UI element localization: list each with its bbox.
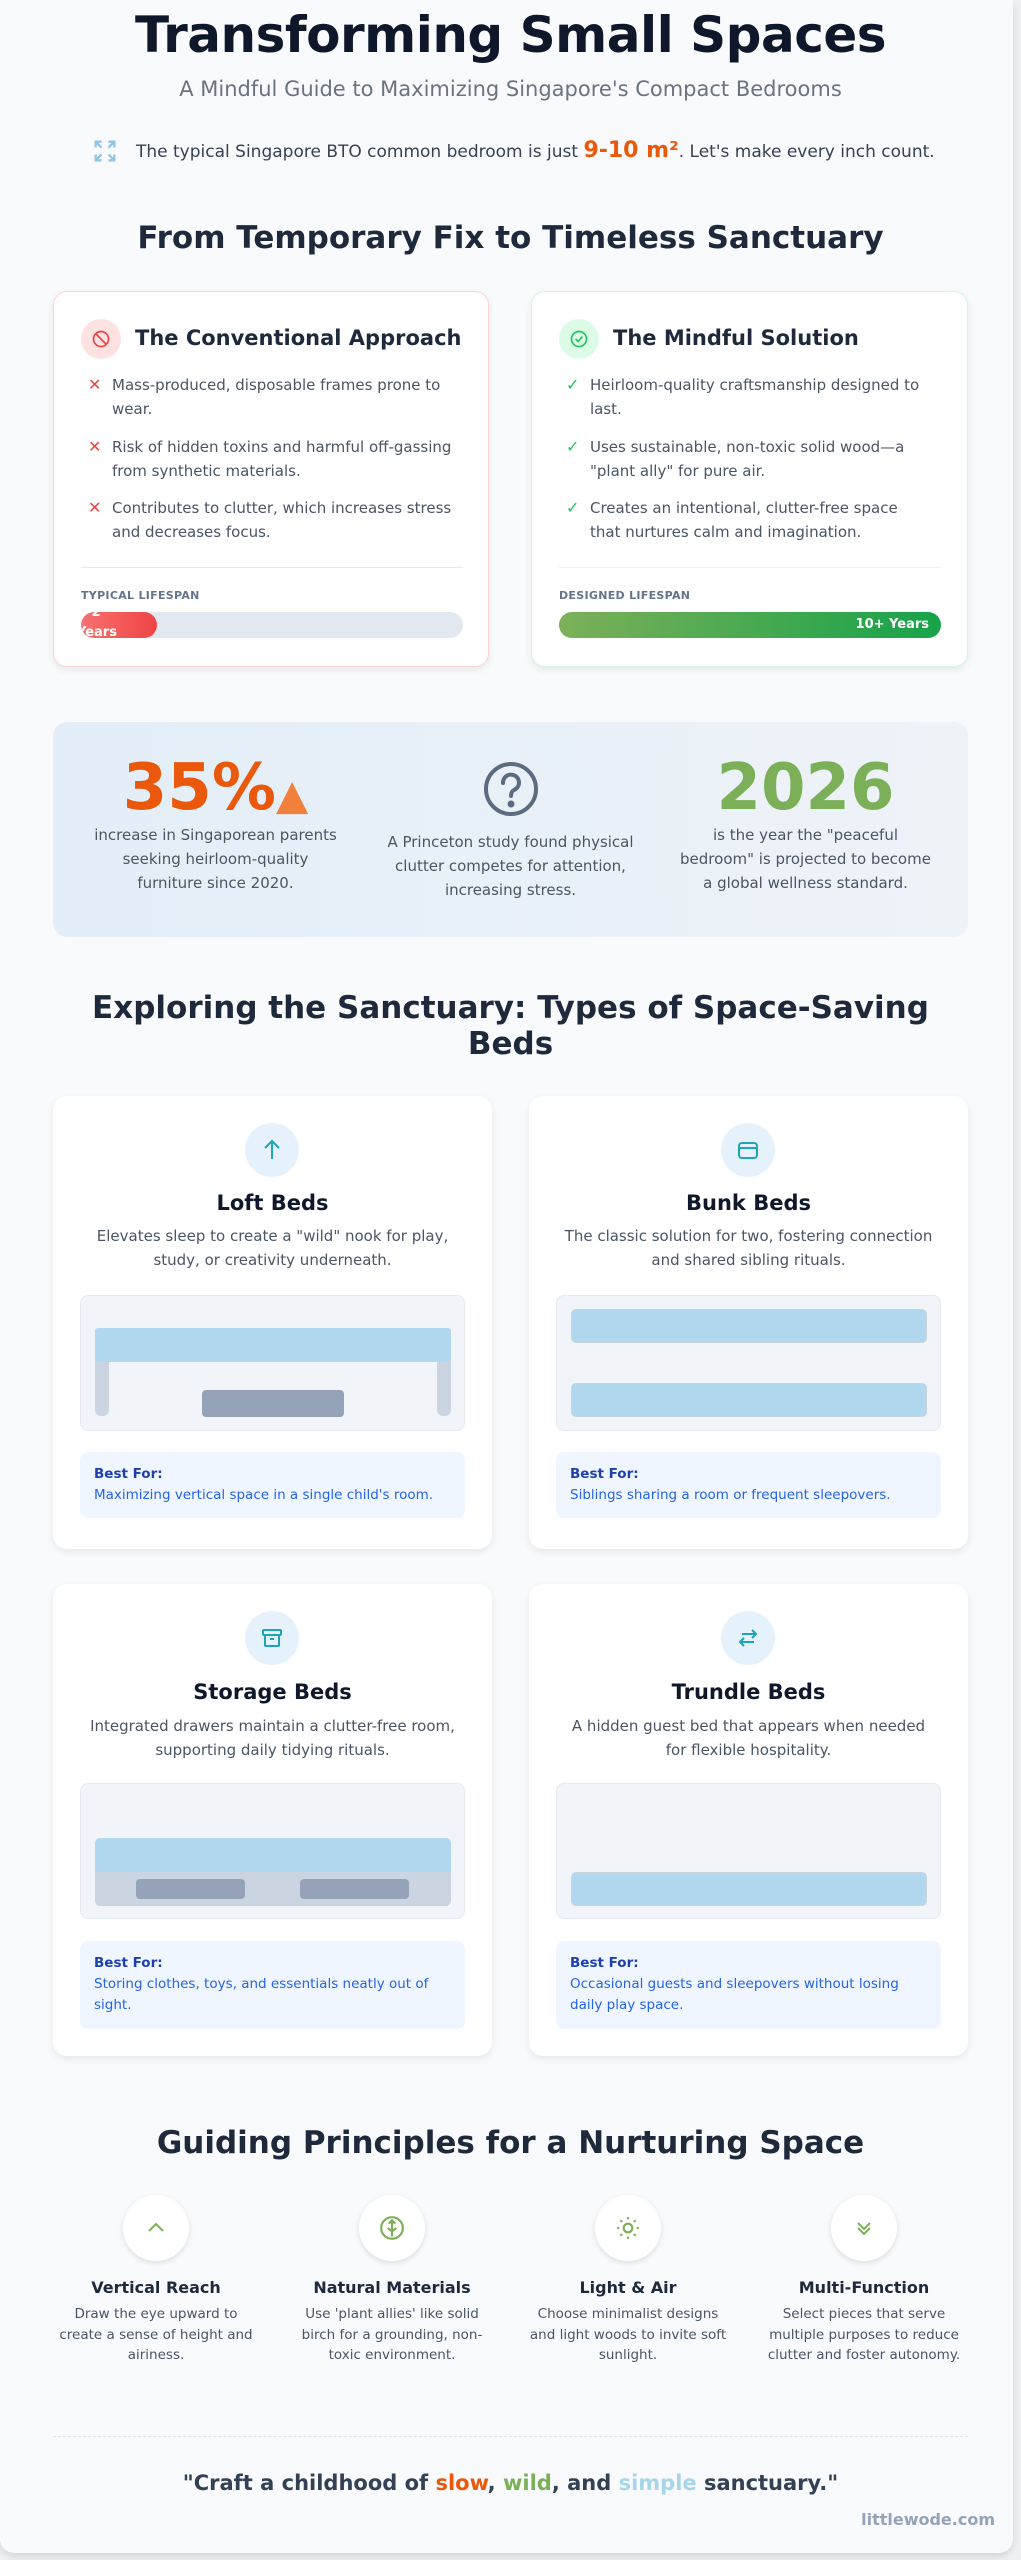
panel: conventional approach: ✕: [88, 375, 101, 394]
heading: guiding principles: Guiding Principles for a Nurturing Space: [157, 2125, 864, 2161]
best for: Occasional guests and sleepovers without losing daily play space.: [570, 1976, 899, 2013]
card: trundle beds: A hidden guest bed that appears when needed for flexible hospitality.: [572, 1717, 925, 1759]
text: Light & Air: [579, 2278, 677, 2297]
text: Multi-Function: [799, 2278, 929, 2297]
panel: mindful solution: Creates an intentional, clutter-free space that nurtures calm and imagination.: [590, 499, 898, 541]
card: bunk beds: The classic solution for two, fostering connection and shared sibling rituals.: [565, 1227, 932, 1269]
bar: 10+ years: [559, 612, 941, 638]
best for: Storing clothes, toys, and essentials neatly out of sight.: [94, 1976, 428, 2013]
icon: archive: [245, 1611, 299, 1665]
best for: [556, 1452, 941, 1518]
icon: question: [484, 762, 538, 816]
best for: [80, 1452, 465, 1518]
text: Natural Materials: [313, 2278, 471, 2297]
card: bunk beds: Bunk Beds: [686, 1191, 811, 1215]
icon: check circle: [559, 319, 599, 359]
panel: mindful solution: Uses sustainable, non-toxic solid wood—a "plant ally" for pure air.: [590, 438, 904, 480]
info line: [94, 138, 935, 163]
icon: bunk: [721, 1123, 775, 1177]
title: Transforming Small Spaces: [135, 6, 886, 64]
heading: from temporary fix: From Temporary Fix to Timeless Sanctuary: [137, 220, 884, 256]
bar: 10+ years: 10+ Years: [856, 617, 929, 632]
illustration: trundle bed: [556, 1783, 941, 1919]
panel: conventional approach: Contributes to clutter, which increases stress and decreases focus.: [112, 499, 451, 541]
stat: 35%: increase in Singaporean parents seeking heirloom-quality furniture since 2020.: [94, 826, 337, 892]
panel: conventional approach: ✕: [88, 437, 101, 456]
principle: light & air: [594, 2211, 662, 2264]
stat: 35%: [94, 751, 337, 892]
text: Select pieces that serve multiple purposes to reduce clutter and foster autonomy.: [768, 2306, 960, 2363]
text: Vertical Reach: [91, 2278, 221, 2297]
best for: Best For:: [94, 1955, 163, 1971]
panel: mindful solution: ✓: [566, 498, 579, 517]
icon: double chevron: [831, 2195, 897, 2261]
bar: 1-2 years: [81, 612, 463, 638]
principle: natural materials: [358, 2211, 426, 2264]
icon: expand arrows: [94, 140, 116, 162]
stat: 2026: is the year the "peaceful bedroom" is projected to become a global wellness standard.: [680, 826, 931, 892]
label: designed lifespan: DESIGNED LIFESPAN: [559, 589, 690, 602]
text: Choose minimalist designs and light woods to invite soft sunlight.: [530, 2306, 726, 2363]
panel: mindful solution: ✓: [566, 437, 579, 456]
illustration: storage bed: [80, 1783, 465, 1919]
card: storage beds: Storage Beds: [193, 1680, 352, 1704]
best for: [80, 1941, 465, 2029]
card: trundle beds: Trundle Beds: [672, 1680, 825, 1704]
best for: [556, 1941, 941, 2029]
icon: tree: [359, 2195, 425, 2261]
subtitle: A Mindful Guide to Maximizing Singapore's Compact Bedrooms: [179, 77, 842, 101]
icon: sun: [595, 2195, 661, 2261]
card: storage beds: Integrated drawers maintain a clutter-free room, supporting daily tidying rituals.: [90, 1717, 455, 1759]
illustration: bunk bed: [556, 1295, 941, 1431]
panel: conventional approach: [53, 291, 489, 667]
label: typical lifespan: TYPICAL LIFESPAN: [81, 589, 200, 602]
card: bunk beds: [529, 1096, 968, 1549]
best for: Best For:: [570, 1955, 639, 1971]
card: loft beds: Elevates sleep to create a "wild" nook for play, study, or creativity underneath.: [97, 1227, 448, 1269]
panel: stats: [53, 722, 968, 937]
icon: swap arrows: [721, 1611, 775, 1665]
heading: exploring the sanctuary: Exploring the Sanctuary: Types of Space-Saving Beds: [92, 990, 929, 1062]
card: loft beds: [53, 1096, 492, 1549]
stat: 2026: 2026: [716, 751, 895, 825]
heading: The Mindful Solution: [613, 326, 859, 350]
icon: prohibited: [81, 319, 121, 359]
stat: 2026: [680, 751, 931, 892]
illustration: loft bed: [80, 1295, 465, 1431]
panel: mindful solution: [531, 291, 968, 667]
best for: Siblings sharing a room or frequent sleepovers.: [570, 1487, 891, 1503]
card: storage beds: [53, 1584, 492, 2056]
panel: mindful solution: ✓: [566, 375, 579, 394]
stat: 35%: 35%▲: [123, 751, 308, 825]
footer: brand: littlewode.com: [861, 2510, 995, 2529]
best for: Best For:: [570, 1466, 639, 1482]
principle: multi-function: [830, 2211, 898, 2264]
heading: The Conventional Approach: [135, 326, 461, 350]
stat: princeton: A Princeton study found physical clutter competes for attention, increasing stress.: [387, 833, 634, 899]
text: Draw the eye upward to create a sense of height and airiness.: [59, 2306, 253, 2363]
bullets: Heirloom-quality craftsmanship designed to last.: [590, 376, 919, 418]
panel: conventional approach: ✕: [88, 498, 101, 517]
info text: The typical Singapore BTO common bedroom is just 9-10 m². Let's make every inch count.: [136, 138, 935, 163]
principle: vertical reach: [122, 2211, 190, 2264]
best for: Maximizing vertical space in a single child's room.: [94, 1487, 433, 1503]
icon: chevron up: [123, 2195, 189, 2261]
quote: "Craft a childhood of slow, wild, and simple sanctuary.": [183, 2471, 838, 2495]
text: Use 'plant allies' like solid birch for a grounding, non-toxic environment.: [302, 2306, 482, 2363]
card: loft beds: Loft Beds: [216, 1191, 329, 1215]
best for: Best For:: [94, 1466, 163, 1482]
panel: conventional approach: Risk of hidden toxins and harmful off-gassing from synthetic materials.: [112, 438, 451, 480]
icon: arrow up: [245, 1123, 299, 1177]
card: trundle beds: [529, 1584, 968, 2056]
stat: princeton: [387, 762, 634, 899]
bullets: Mass-produced, disposable frames prone to wear.: [112, 376, 440, 418]
